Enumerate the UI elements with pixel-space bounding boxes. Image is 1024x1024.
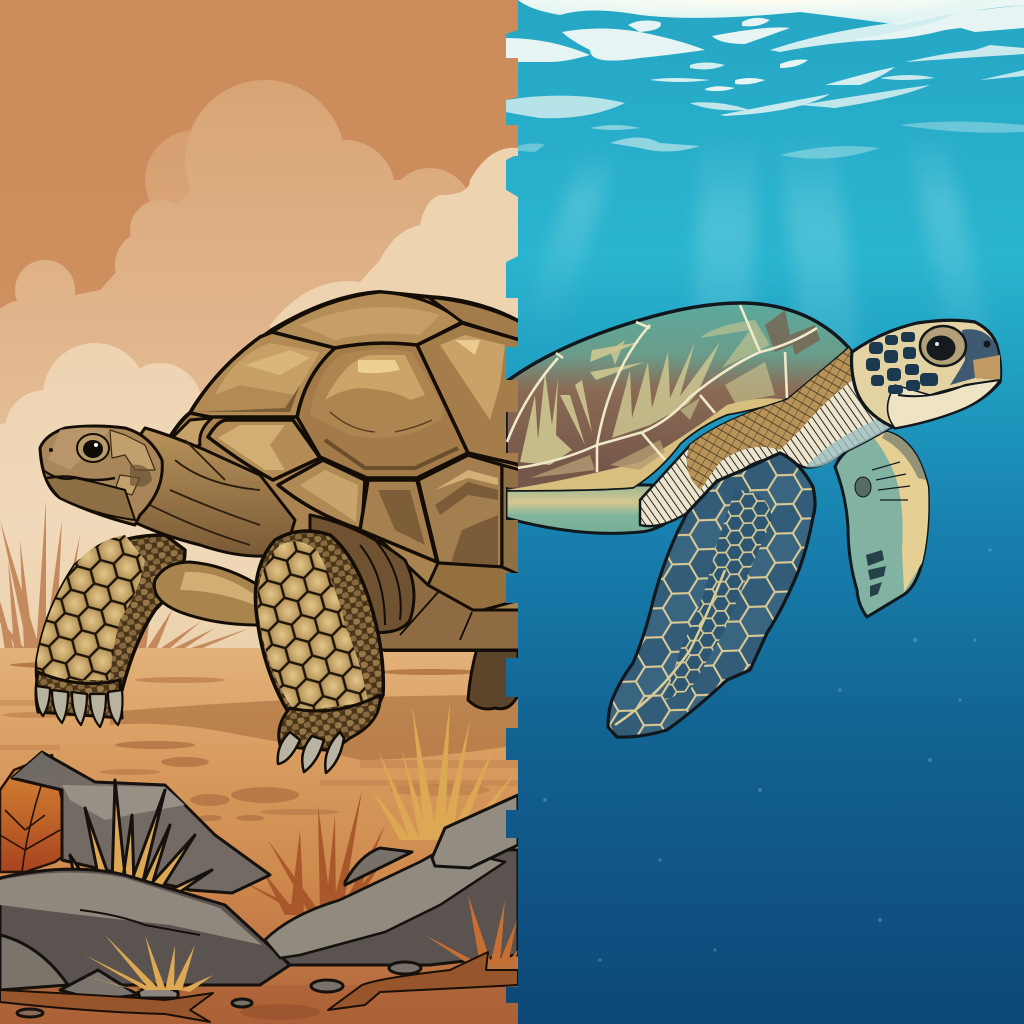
- clouds: back: [0, 80, 517, 425]
- background grass: [0, 500, 250, 650]
- desert ground: [0, 648, 520, 1024]
- shell bottom scute: [428, 563, 520, 610]
- shell yellow band: [506, 398, 787, 490]
- pebbles: [60, 970, 138, 1000]
- sea turtle shell: [506, 303, 849, 490]
- rock: small center: [345, 848, 412, 885]
- shell radial streaks: [520, 342, 645, 465]
- tortoise belly flap: [154, 562, 258, 625]
- light rays: [520, 130, 1000, 440]
- yellow grass on rock: [70, 780, 212, 892]
- tortoise shell: [165, 292, 520, 650]
- tortoise neck: [122, 428, 295, 556]
- clouds: front: [0, 148, 518, 660]
- sea turtle plastron: [506, 485, 700, 533]
- orange grass lower right: [425, 895, 518, 965]
- sea turtle head: [852, 320, 1001, 428]
- background: underwater sea panel: [500, 0, 1024, 1024]
- yellow grass tuft: [372, 702, 517, 840]
- autumn leaf: [0, 754, 60, 874]
- front claws: [278, 732, 344, 773]
- face scales: [866, 332, 938, 394]
- rocks: [0, 752, 518, 1017]
- tortoise far rear leg: [468, 645, 518, 709]
- shell lower scutes: [278, 460, 365, 530]
- shell top scute: [272, 292, 462, 348]
- background: desert sky: [0, 0, 518, 309]
- left desert panel: [0, 0, 520, 1024]
- shell front lower scute: [208, 420, 320, 480]
- sea turtle rear flipper: [835, 432, 928, 617]
- flipper small central scales: [665, 490, 772, 700]
- tortoise front leg: [255, 531, 383, 773]
- rock: lower left: [0, 935, 68, 990]
- rock: right: [265, 848, 518, 965]
- sea turtle: [506, 303, 1001, 737]
- shell outer silhouette: [165, 292, 520, 650]
- nuchal collar: [173, 417, 214, 446]
- shell center scute: [297, 343, 468, 478]
- brown grass tuft: [250, 790, 385, 915]
- rear claws: [36, 686, 122, 727]
- shell left upper scute: [190, 332, 335, 417]
- tortoise head: [40, 426, 162, 525]
- branches: [0, 952, 518, 1022]
- bubbles: [543, 548, 992, 962]
- tortoise: [36, 292, 520, 773]
- water surface highlights: [506, 0, 1024, 159]
- body underside: [376, 538, 518, 652]
- shell right scute: [417, 323, 520, 465]
- yellow grass bottom: [80, 935, 213, 992]
- ground shadow and patches: [0, 662, 518, 1024]
- front foot: [279, 695, 380, 750]
- rock: front left: [0, 869, 290, 985]
- tortoise rear leg: [36, 535, 185, 727]
- rear foot: [36, 672, 122, 718]
- sea turtle front flipper: [608, 453, 815, 737]
- rock: back left: [12, 752, 270, 893]
- shell rear top scute: [428, 297, 520, 340]
- shell scute lines: [507, 305, 817, 472]
- rock: top right: [432, 795, 518, 868]
- sea turtle neck: [640, 348, 895, 526]
